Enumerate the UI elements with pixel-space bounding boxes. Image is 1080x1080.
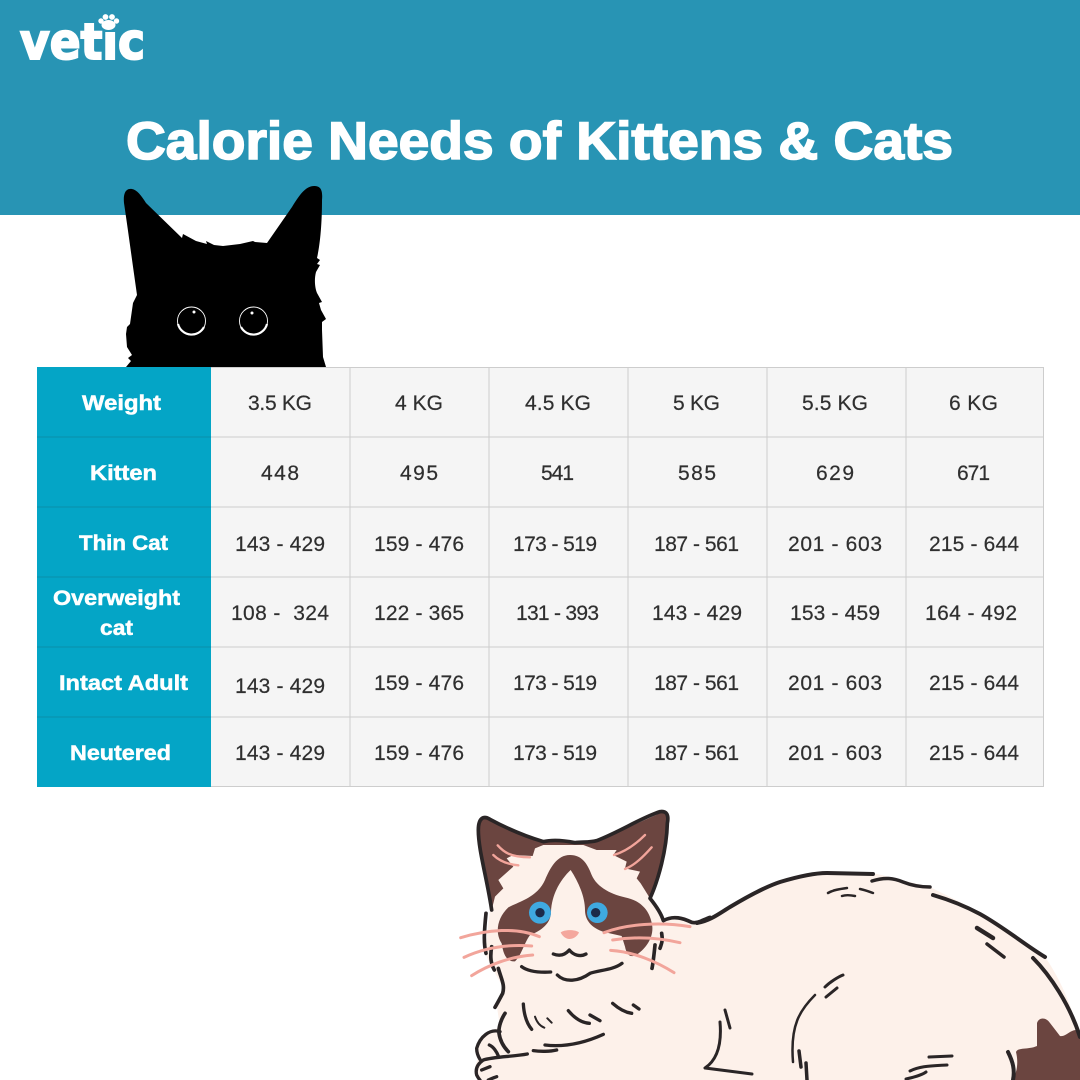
cat nose [561,930,579,939]
table label column [37,367,211,787]
row: intact adult: 201 - 603 [788,672,882,695]
row: kitten: 448 [261,462,299,485]
row: intact adult: 215 - 644 [929,672,1019,695]
row: thin cat: 201 - 603 [788,533,882,556]
row: thin cat: 215 - 644 [929,533,1019,556]
row: overweight cat [231,602,1017,625]
cat body fill and outline [475,812,1080,1080]
row: intact adult: 187 - 561 [654,672,739,695]
cat head [461,812,710,1080]
row: neutered: 143 - 429 [235,742,325,765]
row: kitten: 585 [678,462,716,485]
ragdoll cat illustration [461,812,1080,1080]
row: weight: 5 KG [673,392,720,415]
row: kitten: 541 [541,462,574,485]
row: neutered: 215 - 644 [929,742,1019,765]
table label column: Kitten [90,462,157,485]
black cat illustration [124,186,326,367]
row: overweight cat: 108 - 324 [231,602,329,625]
row: weight: 6 KG [949,392,998,415]
ear pink tufts [493,835,652,869]
row: weight: 4 KG [395,392,443,415]
row: kitten [261,462,990,485]
calorie table [37,367,1044,787]
row: overweight cat: 122 - 365 [374,602,464,625]
table label column: Intact Adult [59,672,188,695]
row: overweight cat: 153 - 459 [790,602,880,625]
row: neutered: 187 - 561 [654,742,739,765]
cat mouth and fur lines [476,950,639,1080]
row: neutered: 159 - 476 [374,742,464,765]
table label column: Overweight [53,587,180,610]
row: kitten: 671 [957,462,990,485]
row: weight: 5.5 KG [802,392,868,415]
row: intact adult [235,672,1019,698]
row: intact adult: 173 - 519 [513,672,597,695]
icon: cat eyes [178,307,268,335]
row: kitten: 629 [816,462,854,485]
ears brown patch [478,812,668,910]
icon: paw [98,14,119,30]
row: weight: 4.5 KG [525,392,591,415]
logo: vetic: vetic [20,13,145,71]
table label column: Thin Cat [79,532,168,555]
head outline [478,812,710,1052]
row: weight: 3.5 KG [248,392,312,415]
table label column: Neutered [70,742,171,765]
header band [0,0,1080,215]
table value cells [211,367,1044,787]
row: thin cat: 187 - 561 [654,533,739,556]
row: overweight cat: 143 - 429 [652,602,742,625]
facial mask [498,855,652,961]
row: intact adult: 143 - 429 [235,675,325,698]
row: kitten: 495 [400,462,438,485]
title: Calorie Needs of Kittens & Cats [126,112,953,171]
table label column: Weight [82,392,161,415]
cat whiskers [461,924,690,976]
row: neutered: 201 - 603 [788,742,882,765]
row: thin cat [235,533,1019,556]
row: intact adult: 159 - 476 [374,672,464,695]
row: thin cat: 143 - 429 [235,533,325,556]
row: overweight cat: 164 - 492 [925,602,1017,625]
row: thin cat: 159 - 476 [374,533,464,556]
row: overweight cat: 131 - 393 [516,602,599,625]
row: weight [248,392,998,415]
row: neutered: 173 - 519 [513,742,597,765]
cat eyes [529,902,608,924]
table label column: cat [100,617,133,640]
row: thin cat: 173 - 519 [513,533,597,556]
row: neutered [235,742,1019,765]
